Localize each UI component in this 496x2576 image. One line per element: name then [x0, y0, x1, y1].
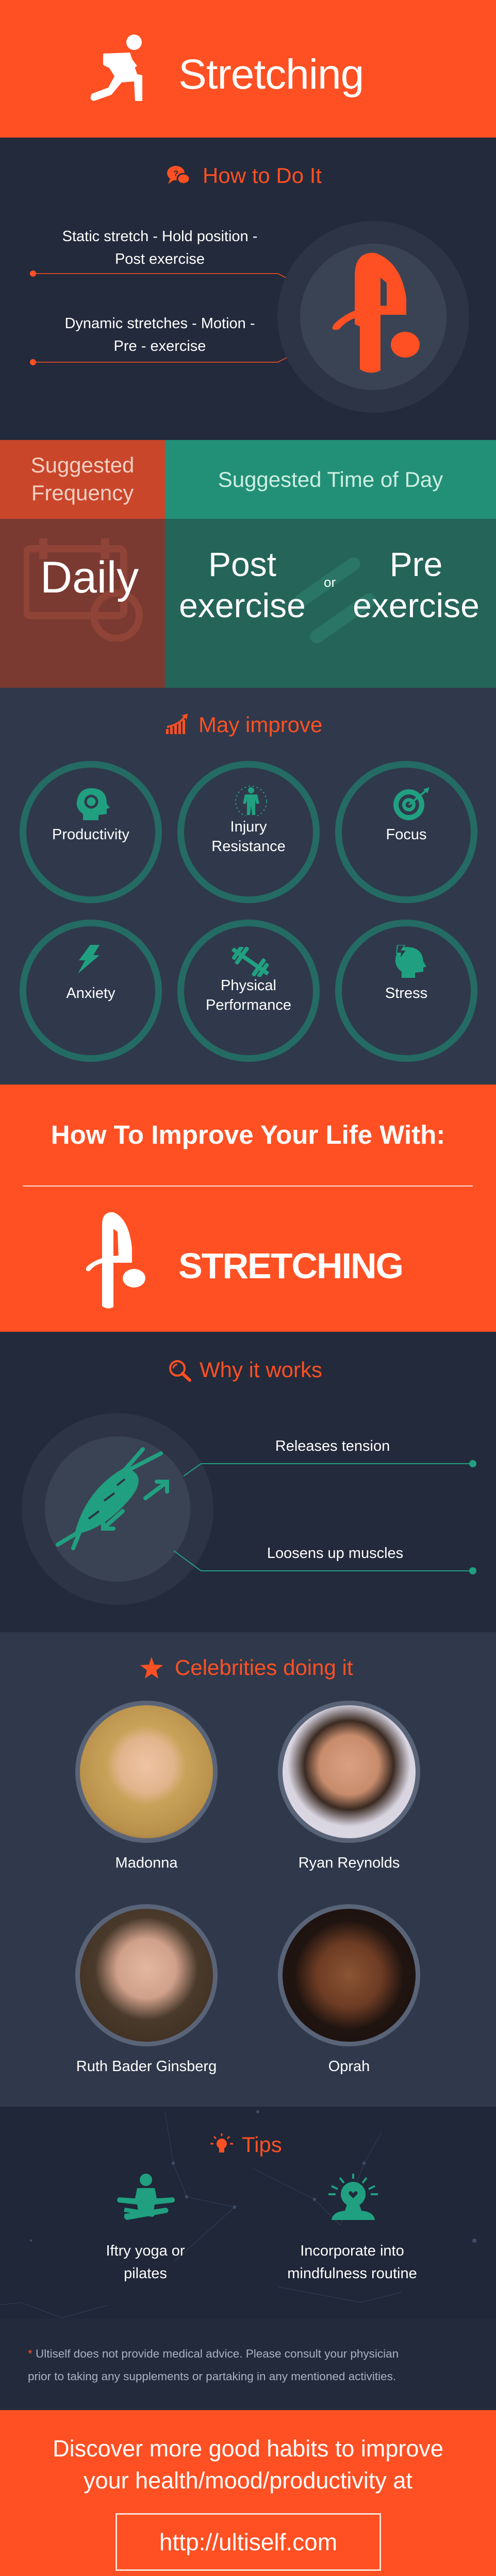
name: ruth bader ginsberg: Ruth Bader Ginsberg [76, 2058, 217, 2075]
heading: suggested frequency [0, 440, 165, 519]
text: dynamic stretches: Dynamic stretches - Motion - [64, 315, 255, 332]
heading: suggested frequency: Suggested [31, 453, 134, 477]
circle: productivity: Productivity [52, 826, 129, 843]
tip: yoga: Iftry yoga or [106, 2243, 185, 2259]
heading: tips [210, 2132, 282, 2157]
url box: http://ultiself.com [159, 2529, 337, 2555]
time of day values [165, 519, 496, 688]
circle: focus: Focus [386, 826, 426, 843]
circle: physical performance: Performance [206, 997, 291, 1013]
disclaimer: prior to taking any supplements or partaking in any mentioned activities. [28, 2370, 396, 2383]
icon: circle with stretch figure [277, 221, 469, 413]
icon: speech bubbles [167, 166, 189, 184]
icon: growth chart [166, 714, 188, 734]
circle: stress [335, 920, 477, 1062]
circle: physical performance [177, 920, 320, 1062]
panel: call to action [0, 2410, 496, 2576]
text: static stretch [62, 228, 257, 267]
tip: mindfulness: Incorporate into [300, 2243, 404, 2259]
heading: how to do it: How to Do It [203, 163, 322, 188]
disclaimer [28, 2347, 399, 2383]
circle: stress: Stress [385, 985, 427, 1002]
url box [115, 2513, 381, 2571]
heading: how to improve your life with: How To Improve Your Life With: [51, 1120, 445, 1149]
frequency value: Daily [40, 553, 139, 602]
tip: yoga [106, 2174, 185, 2282]
frequency value [0, 519, 165, 688]
callout: releases tension: Releases tension [275, 1438, 390, 1454]
tip: mindfulness: mindfulness routine [287, 2265, 417, 2282]
photo: ryan reynolds [278, 1701, 420, 1843]
panel: tips [0, 2107, 496, 2410]
icon: star [140, 1657, 163, 1679]
icon: faint calendar [24, 538, 143, 641]
icon: stretching person [91, 35, 142, 101]
panel: how to improve your life [0, 1084, 496, 1332]
heading: why it works: Why it works [200, 1358, 322, 1382]
photo: oprah [278, 1904, 420, 2046]
text: dynamic stretches: Pre - exercise [114, 338, 206, 354]
name: ryan reynolds: Ryan Reynolds [299, 1855, 400, 1871]
icon: speech bubbles: ? [173, 170, 178, 178]
constellation background [0, 2110, 476, 2318]
connector lines [30, 270, 287, 365]
heading: may improve: May improve [199, 713, 322, 737]
icon: white stretch figure [86, 1212, 145, 1309]
panel: may improve [0, 688, 496, 1084]
photo: ruth bader ginsberg [75, 1904, 218, 2046]
panel: celebrities [0, 1632, 496, 2107]
time of day values: exercise [353, 586, 480, 624]
heading: tips: Tips [242, 2132, 282, 2157]
panel: why it works [0, 1332, 496, 1632]
time of day values: Pre [390, 545, 442, 583]
circle: anxiety: Anxiety [66, 985, 115, 1002]
time of day values: or [324, 574, 336, 590]
cta text: your health/mood/productivity at [84, 2467, 412, 2494]
time of day values: Post [208, 545, 276, 583]
circle: focus [335, 761, 477, 903]
cta text: Discover more good habits to improve [53, 2435, 443, 2462]
title: Stretching [178, 51, 363, 98]
circle: injury resistance [177, 761, 320, 903]
circle: physical performance: Physical [221, 977, 276, 994]
callout: loosens up muscles: Loosens up muscles [267, 1545, 403, 1562]
connector lines [173, 1460, 476, 1574]
circle: injury resistance: Resistance [211, 838, 286, 855]
disclaimer: * Ultiself does not provide medical advice. Please consult your physician [28, 2347, 399, 2360]
circle: anxiety [20, 920, 162, 1062]
tip: yoga: pilates [124, 2265, 167, 2282]
icon: magnifier [169, 1360, 191, 1382]
circle: productivity [20, 761, 162, 903]
name: oprah: Oprah [328, 2058, 370, 2075]
text: dynamic stretches [64, 315, 255, 354]
heading: suggested time of day [165, 440, 496, 519]
panel: suggested frequency [0, 440, 496, 688]
photo: madonna [75, 1701, 218, 1843]
heading: suggested frequency: Frequency [31, 481, 134, 505]
header [0, 0, 496, 138]
text: STRETCHING: STRETCHING [178, 1246, 403, 1286]
icon: muscle circle [22, 1413, 213, 1605]
icon: faint dumbbells [295, 557, 375, 643]
cta text [53, 2435, 443, 2494]
panel: how to do it [0, 138, 496, 440]
circle: injury resistance: Injury [230, 819, 267, 835]
heading: celebrities doing it: Celebrities doing it [175, 1655, 353, 1680]
text: static stretch: Static stretch - Hold position - [62, 228, 257, 245]
tip: mindfulness [287, 2174, 417, 2282]
time of day values: exercise [179, 586, 306, 624]
icon: lightbulb [210, 2133, 233, 2153]
name: madonna: Madonna [115, 1855, 177, 1871]
heading: suggested time of day: Suggested Time of Day [218, 467, 443, 492]
text: static stretch: Post exercise [115, 251, 205, 267]
